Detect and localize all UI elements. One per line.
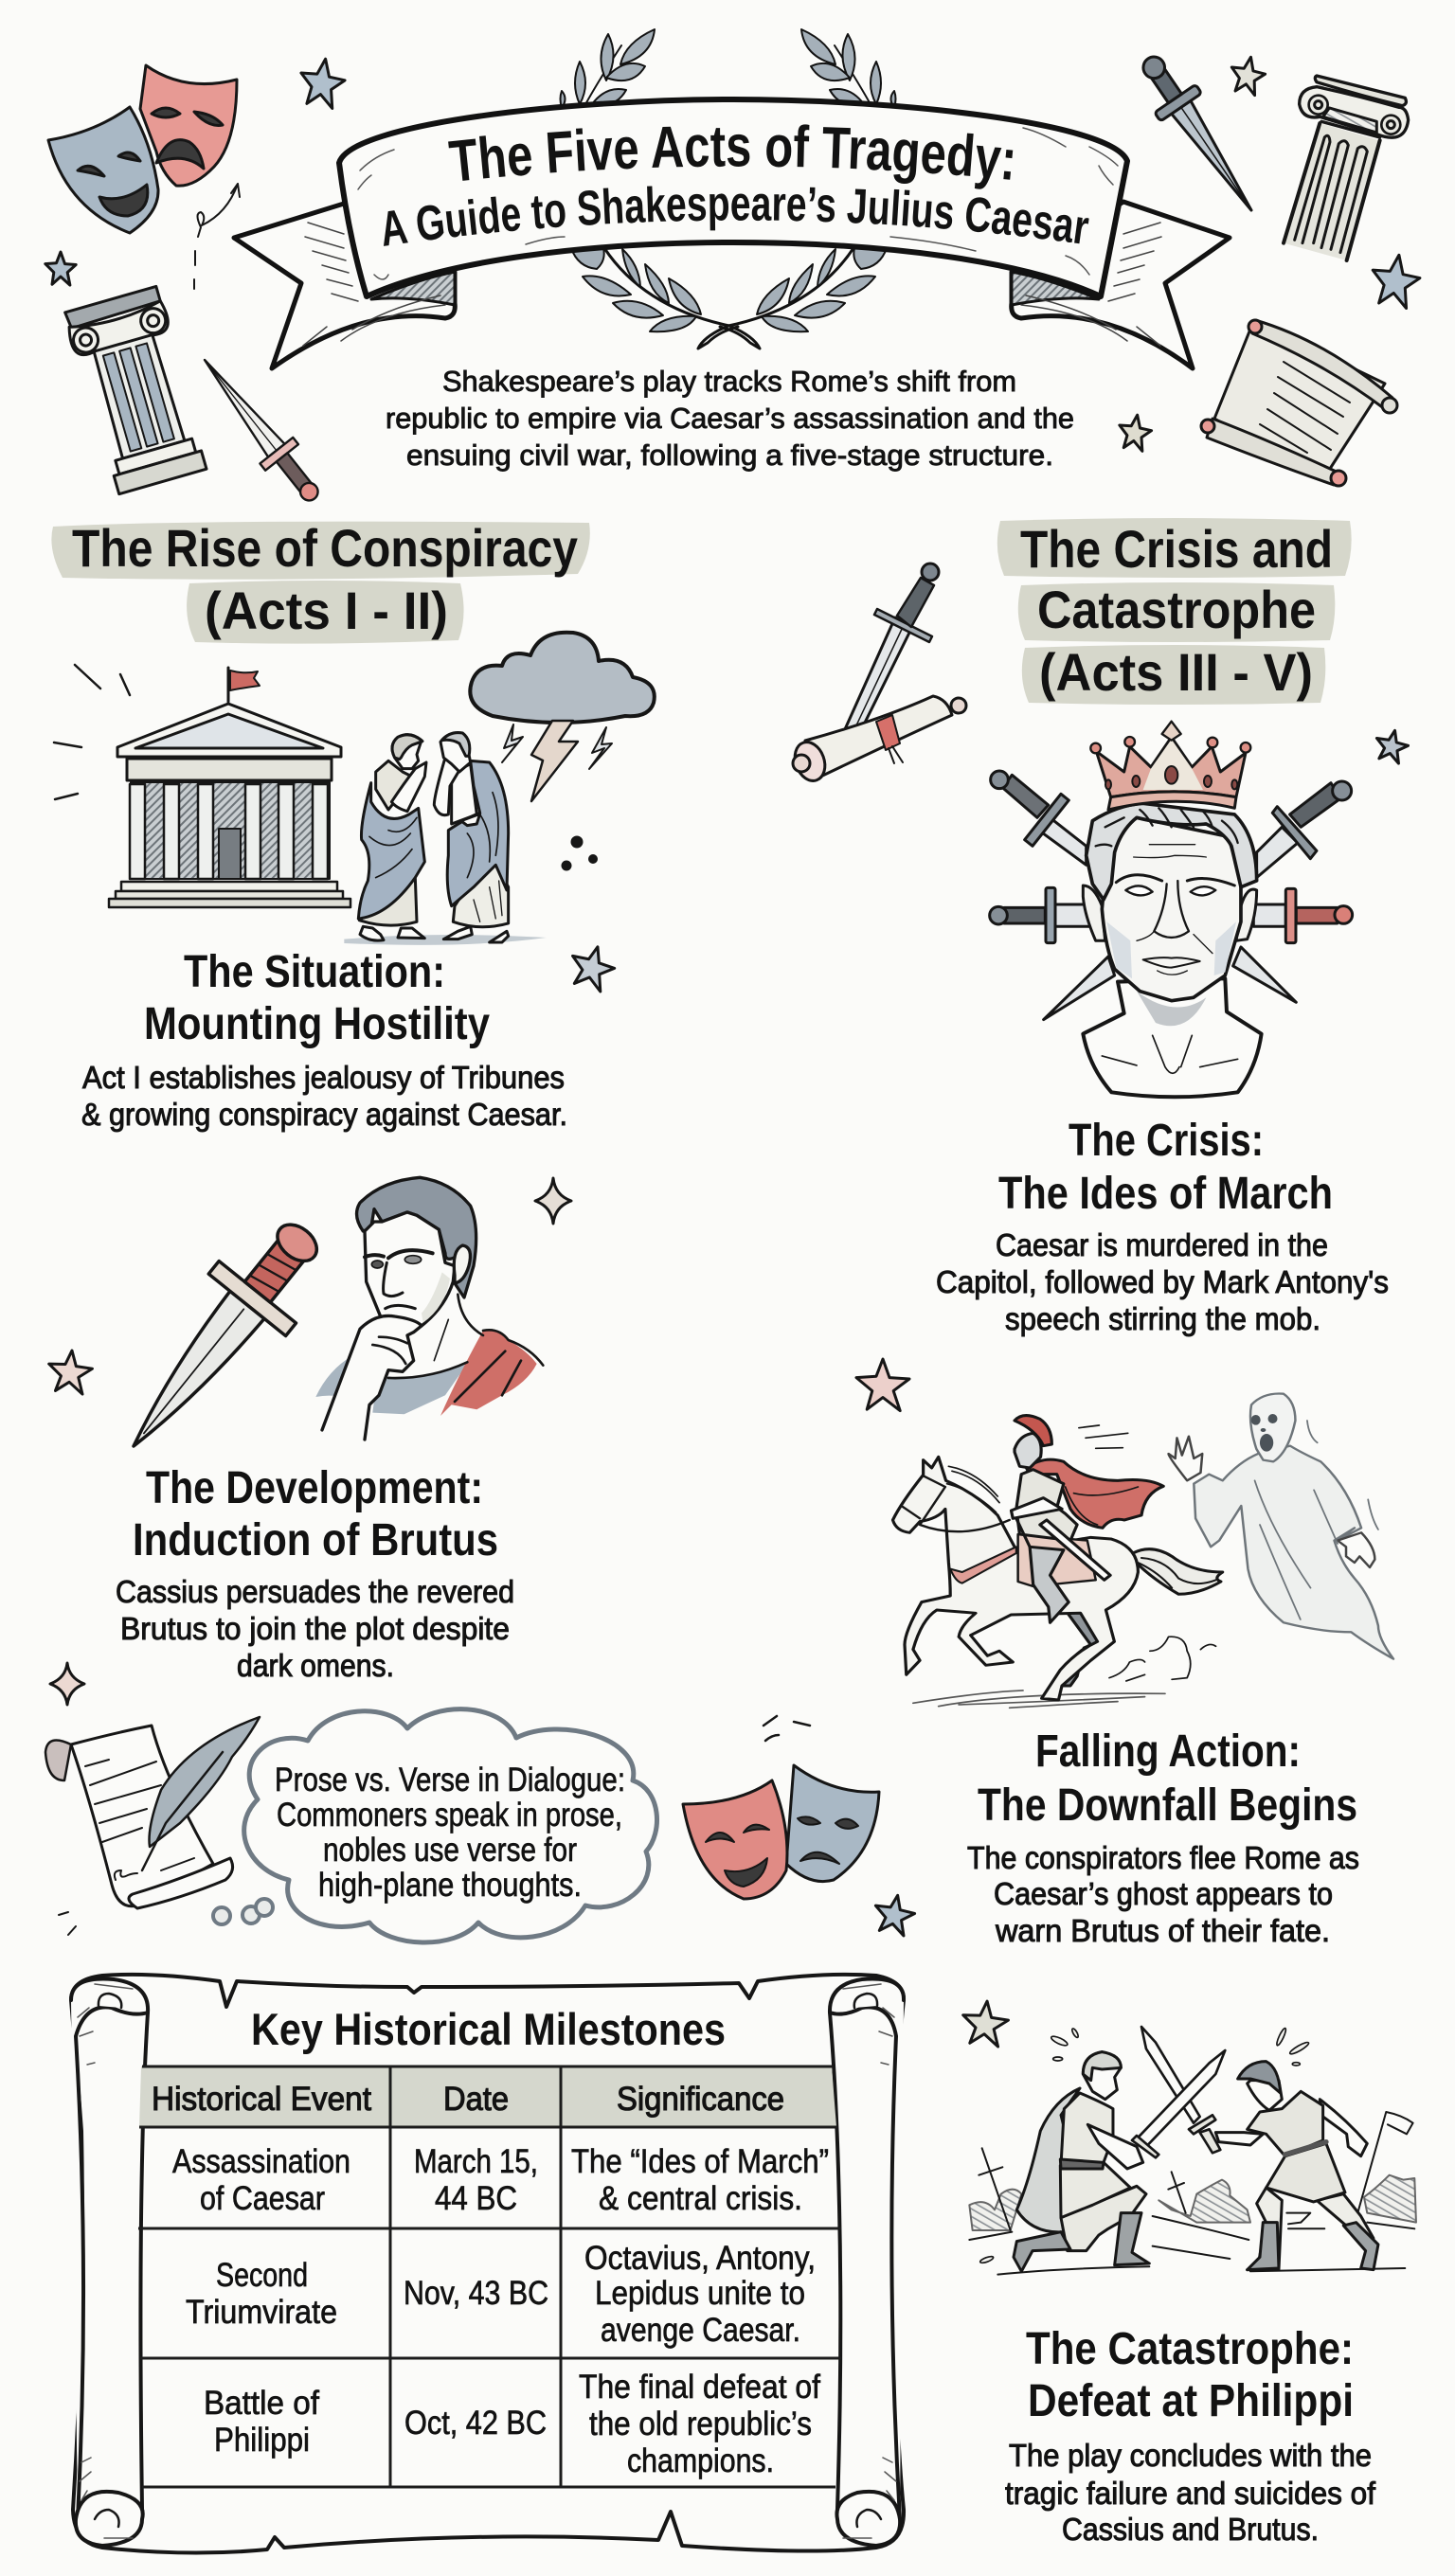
icon: quill and letter — [45, 1717, 260, 1935]
the development body — [116, 1574, 514, 1683]
bust swords — [990, 771, 1353, 1020]
icon: star blue right — [1368, 252, 1423, 310]
icon: two whispering senators — [344, 733, 547, 945]
the crisis body: speech stirring the mob. — [1005, 1301, 1320, 1336]
arrow: dashed curl — [194, 184, 240, 289]
bust facial features — [1116, 845, 1234, 975]
table header labels — [152, 2081, 784, 2118]
table header labels: Significance — [617, 2081, 784, 2118]
icon: star blue lower — [871, 1892, 917, 1937]
icon: dagger left — [189, 347, 331, 511]
title banner — [234, 29, 1230, 368]
the crisis body: Capitol, followed by Mark Antony's — [936, 1264, 1389, 1299]
the crisis body: Caesar is murdered in the — [996, 1227, 1328, 1262]
table row: second triumvirate — [186, 2240, 816, 2349]
table row: battle of philippi: The final defeat of — [579, 2369, 820, 2406]
table row: second triumvirate: Second — [216, 2257, 308, 2294]
intro text — [386, 365, 1074, 472]
section heading: the crisis and catastrophe: The Crisis and — [1020, 519, 1333, 579]
table row: battle of philippi: Oct, 42 BC — [404, 2405, 547, 2442]
icon: parchment scroll top right — [1201, 320, 1397, 486]
the catastrophe heading — [1026, 2324, 1354, 2426]
banner left tail — [234, 204, 455, 368]
table row: battle of philippi: the old republic’s — [589, 2406, 812, 2442]
thought bubble trail — [213, 1899, 273, 1924]
the situation heading — [144, 947, 490, 1049]
bust hair — [1087, 803, 1257, 900]
table row: second triumvirate: Lepidus unite to — [595, 2275, 805, 2312]
falling action body: The conspirators flee Rome as — [967, 1840, 1359, 1875]
icon: caesar's ghost — [1169, 1393, 1393, 1659]
icon: ionic column top left — [63, 286, 210, 495]
table header labels: Date — [443, 2081, 509, 2118]
falling action heading: The Downfall Begins — [978, 1780, 1357, 1831]
section heading: the crisis and catastrophe: (Acts III - V) — [1039, 642, 1313, 702]
the catastrophe body: Cassius and Brutus. — [1062, 2512, 1319, 2547]
table row: assassination of caesar: of Caesar — [200, 2180, 325, 2217]
the catastrophe body: The play concludes with the — [1009, 2438, 1372, 2473]
section heading: the crisis and catastrophe: Catastrophe — [1037, 580, 1316, 639]
icon: red-hilted dagger — [95, 1200, 345, 1477]
callout text: prose vs verse: nobles use verse for — [323, 1832, 577, 1869]
callout text: prose vs verse: Prose vs. Verse in Dialogue: — [275, 1762, 625, 1798]
icon: horseman fleeing — [892, 1416, 1223, 1708]
table title: Key Historical Milestones — [251, 2004, 726, 2054]
intro text: ensuing civil war, following a five-stage structure. — [406, 438, 1053, 472]
the situation body: Act I establishes jealousy of Tribunes — [82, 1060, 565, 1095]
table row: assassination of caesar: 44 BC — [435, 2180, 517, 2217]
table row: battle of philippi: Philippi — [214, 2422, 310, 2459]
table row: assassination of caesar: Assassination — [172, 2143, 350, 2180]
lower laurel branches — [571, 248, 887, 349]
icon: storm cloud with lightning — [470, 633, 655, 869]
scroll paper — [71, 1975, 904, 2553]
icon: star beige lower — [1117, 413, 1154, 452]
duel crossed swords — [1132, 2027, 1225, 2157]
callout text: prose vs verse: Commoners speak in prose, — [277, 1797, 622, 1834]
the development heading: Induction of Brutus — [133, 1515, 498, 1565]
bust ears — [1083, 886, 1105, 940]
icon: star small right — [1373, 727, 1410, 764]
ribbon shading strokes — [358, 128, 1118, 279]
icon: theatre masks lower — [683, 1716, 879, 1899]
table row: battle of philippi — [204, 2369, 820, 2479]
the situation heading: Mounting Hostility — [144, 999, 490, 1049]
table row: assassination of caesar — [172, 2143, 829, 2217]
banner right tail — [1012, 202, 1230, 368]
callout text: prose vs verse — [275, 1762, 625, 1904]
icon: theatre masks top left — [48, 65, 237, 233]
section heading: the rise of conspiracy: The Rise of Conspiracy — [72, 518, 578, 578]
the development heading: The Development: — [146, 1463, 483, 1513]
the situation body: & growing conspiracy against Caesar. — [81, 1097, 567, 1132]
duel right soldier — [1215, 2062, 1378, 2270]
section heading: the rise of conspiracy — [51, 518, 590, 644]
icon: star blue top — [296, 56, 348, 110]
icon: star beige top right — [1228, 54, 1267, 97]
the development heading — [133, 1463, 498, 1565]
icon: sword and rolled scroll — [790, 564, 966, 785]
table header labels: Historical Event — [152, 2081, 371, 2118]
icon: caesar bust with crown and swords — [990, 722, 1353, 1097]
icon: star pink — [46, 1349, 94, 1395]
icon: star blue mid-left — [566, 941, 619, 993]
the situation body — [81, 1060, 567, 1132]
title text: The Five Acts of Tragedy: — [448, 124, 1014, 189]
table row: second triumvirate: Triumvirate — [186, 2294, 337, 2331]
table grid — [138, 2066, 841, 2487]
the crisis heading: The Crisis: — [1069, 1116, 1264, 1166]
icon: star pink right — [856, 1359, 909, 1411]
table header band — [139, 2066, 836, 2127]
icon: sparkle upper — [535, 1178, 571, 1224]
icon: ionic column top right — [1284, 76, 1409, 260]
the development body: Cassius persuades the revered — [116, 1574, 514, 1609]
icon: sparkle lower — [50, 1663, 84, 1705]
title text — [384, 124, 1089, 246]
the catastrophe body — [1005, 2438, 1376, 2547]
the crisis heading — [998, 1116, 1333, 1219]
the catastrophe body: tragic failure and suicides of — [1005, 2476, 1376, 2511]
table row: battle of philippi: Battle of — [204, 2385, 319, 2422]
callout: thought cloud — [244, 1709, 657, 1942]
bust crown — [1096, 737, 1246, 797]
icon: duel at philippi — [969, 2027, 1416, 2275]
duel left soldier — [1014, 2052, 1149, 2271]
the development body: dark omens. — [237, 1648, 394, 1683]
icon: star beige duel — [961, 1999, 1010, 2048]
falling action body: warn Brutus of their fate. — [995, 1913, 1330, 1948]
the crisis heading: The Ides of March — [998, 1169, 1333, 1219]
the crisis body — [936, 1227, 1389, 1336]
table row: second triumvirate: Octavius, Antony, — [584, 2240, 816, 2277]
the situation heading: The Situation: — [184, 947, 445, 997]
scroll right roll — [830, 1978, 904, 2546]
falling action heading: Falling Action: — [1035, 1726, 1301, 1777]
bust neck and shoulders — [1083, 978, 1262, 1097]
table row: assassination of caesar: March 15, — [414, 2143, 538, 2180]
bust face — [1102, 817, 1241, 1001]
falling action body: Caesar’s ghost appears to — [994, 1876, 1333, 1911]
the catastrophe heading: Defeat at Philippi — [1028, 2376, 1354, 2426]
icon: brutus pondering — [315, 1177, 543, 1440]
title text: A Guide to Shakespeare’s Julius Caesar — [384, 186, 1089, 246]
intro text: Shakespeare’s play tracks Rome’s shift from — [442, 365, 1016, 398]
the catastrophe heading: The Catastrophe: — [1026, 2324, 1354, 2374]
table row: assassination of caesar: & central crisis. — [599, 2180, 802, 2217]
table row: assassination of caesar: The “Ides of March” — [571, 2143, 829, 2180]
panel: key historical milestones scroll — [71, 1975, 904, 2553]
icon: roman temple — [54, 665, 350, 907]
icon: dagger top right — [1127, 45, 1272, 224]
table row: battle of philippi: champions. — [627, 2442, 774, 2479]
upper laurel branches — [561, 29, 896, 108]
table row: second triumvirate: Nov, 43 BC — [404, 2275, 548, 2312]
callout text: prose vs verse: high-plane thoughts. — [318, 1867, 582, 1904]
duel background — [969, 2028, 1416, 2275]
falling action heading — [978, 1726, 1357, 1831]
banner main ribbon — [339, 99, 1127, 296]
icon: star small left — [45, 252, 76, 285]
falling action body — [967, 1840, 1359, 1948]
banner fold shadows — [371, 272, 1099, 305]
the development body: Brutus to join the plot despite — [120, 1611, 510, 1646]
section heading: the rise of conspiracy: (Acts I - II) — [205, 581, 448, 640]
section heading: the crisis and catastrophe — [997, 518, 1352, 705]
table row: second triumvirate: avenge Caesar. — [601, 2312, 800, 2349]
intro text: republic to empire via Caesar’s assassination and the — [386, 402, 1074, 435]
scroll left roll — [71, 1978, 148, 2546]
banner tail hatching — [303, 223, 1161, 346]
